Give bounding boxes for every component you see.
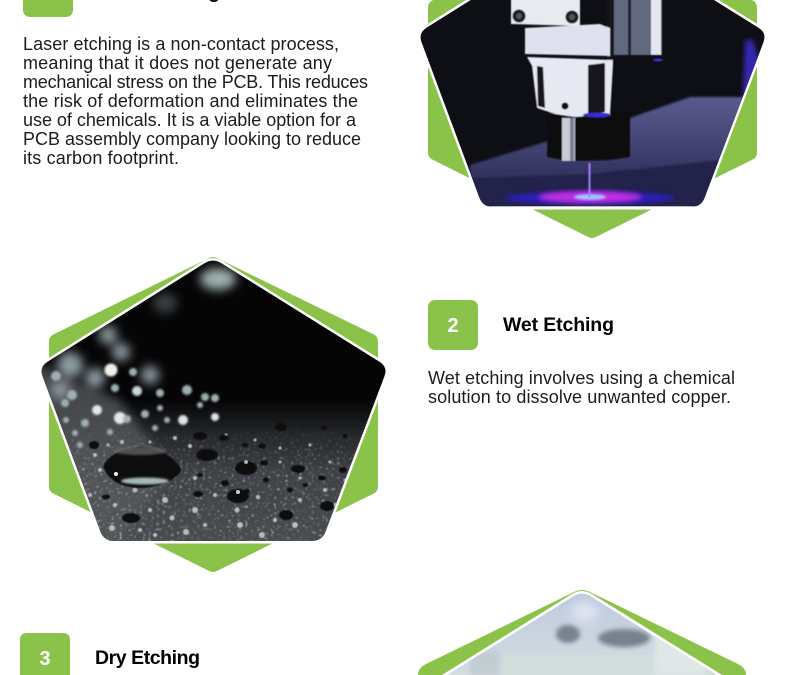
number badge 2: 2 (447, 315, 459, 337)
photo: laser head (420, 0, 764, 207)
image panel: laser etching machine in green hexagon (410, 0, 780, 230)
section 3: dry etching text (20, 633, 200, 675)
photo: water droplets on a dark surface (30, 255, 395, 545)
image panel: water droplets in green hexagon (30, 255, 395, 564)
heading: Dry Etching: Dry Etching (95, 647, 200, 669)
photo: blurred laboratory (440, 590, 725, 675)
section 1: laser etching text (23, 0, 368, 168)
white pentagon outline (421, 0, 764, 207)
text block: laser etching description: its carbon footprint. (23, 148, 179, 168)
green hexagon backing (57, 265, 370, 564)
text block: laser etching description: use of chemicals. It is a viable option for a (23, 110, 357, 130)
green hexagon backing (418, 590, 746, 675)
text block: laser etching description: mechanical stress on the PCB. This reduces (23, 72, 368, 92)
text block: wet etching description: Wet etching involves using a chemical (428, 368, 735, 388)
text block: laser etching description: meaning that it does not generate any (23, 53, 332, 73)
text block: laser etching description: the risk of deformation and eliminates the (23, 91, 358, 111)
number badge 2 (428, 300, 478, 350)
section 2: wet etching text (428, 300, 735, 407)
heading: Wet Etching: Wet Etching (503, 314, 614, 336)
number badge 3: 3 (39, 648, 51, 670)
white pentagon outline (442, 591, 722, 675)
image panel: dry etching lab in green hexagon (418, 590, 746, 675)
text block: wet etching description (428, 368, 735, 407)
text block: laser etching description: PCB assembly company looking to reduce (23, 129, 361, 149)
text block: laser etching description: Laser etching is a non-contact process, (23, 34, 339, 54)
text block: wet etching description: solution to dissolve unwanted copper. (428, 387, 731, 407)
text block: laser etching description (23, 34, 368, 168)
white pentagon outline (42, 261, 385, 541)
number badge 3 (20, 633, 70, 675)
green hexagon backing (436, 0, 749, 230)
number badge 1 (23, 0, 73, 17)
